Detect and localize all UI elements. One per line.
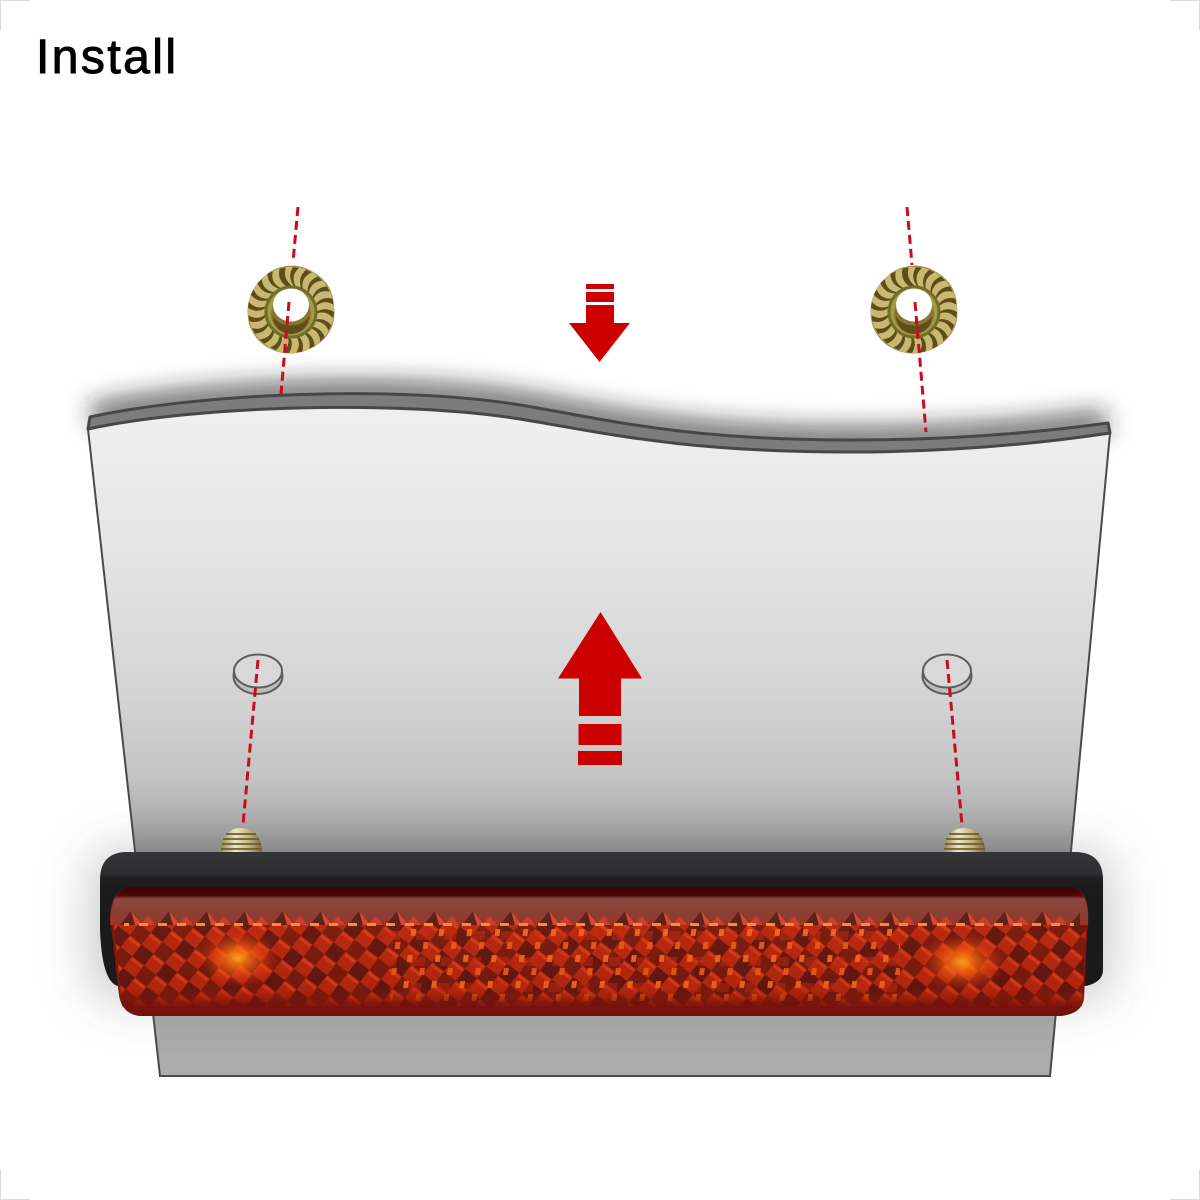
prism teeth xyxy=(118,906,1080,926)
icon: left mounting hole xyxy=(234,654,282,694)
arrow: up xyxy=(558,612,642,765)
rubber backing xyxy=(100,852,1103,986)
shadow around reflector xyxy=(90,850,1112,1000)
plate top edge xyxy=(88,394,1110,452)
icon: left threaded stud xyxy=(221,828,262,852)
left glow xyxy=(196,928,280,988)
prism pattern xyxy=(114,925,1086,1006)
panel: metal plate xyxy=(88,394,1110,1076)
right glow xyxy=(918,932,1006,992)
icon: right threaded stud xyxy=(944,828,985,852)
icon: left flange nut xyxy=(248,265,334,354)
panel: red reflector xyxy=(100,852,1103,1016)
icon: right flange nut xyxy=(870,265,957,354)
arrow: down xyxy=(569,284,630,362)
icon: right mounting hole xyxy=(922,654,972,694)
bright prism edge xyxy=(124,922,1074,926)
lens shading xyxy=(112,925,1087,1016)
title: Install xyxy=(36,31,176,84)
shadow above plate edge xyxy=(92,393,1106,439)
centre prism highlights xyxy=(390,928,900,1004)
lens top band xyxy=(110,887,1088,925)
alignment guide lines xyxy=(243,207,962,825)
lens body xyxy=(110,887,1088,1016)
